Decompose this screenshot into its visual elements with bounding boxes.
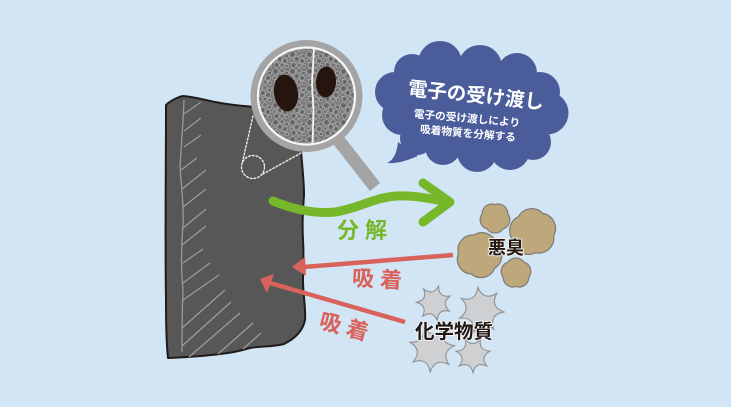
label: adsorption lower: 吸着 xyxy=(317,308,377,347)
red adsorption arrow lower xyxy=(260,274,405,322)
bubble heading: 電子の受け渡し xyxy=(407,77,545,114)
dotted callout circle xyxy=(242,116,301,178)
lens microscopic pores xyxy=(256,46,356,146)
charcoal slab xyxy=(166,96,305,358)
speech bubble xyxy=(375,41,568,172)
label: adsorption upper: 吸着 xyxy=(351,266,409,293)
large pore left xyxy=(274,74,298,112)
lens ring xyxy=(250,40,362,152)
bubble body text xyxy=(413,107,521,144)
red adsorption arrow upper xyxy=(292,255,453,276)
label: chemical substances: 化学物質 xyxy=(415,320,493,343)
slab hatching xyxy=(180,100,261,357)
green decomposition arrow xyxy=(273,183,450,222)
magnifying glass xyxy=(250,40,375,187)
bubble body text: 吸着物質を分解する xyxy=(419,123,516,144)
odor particles xyxy=(447,200,558,291)
bubble body text: 電子の受け渡しにより xyxy=(413,107,521,130)
magnifier handle xyxy=(336,137,375,187)
label: odor: 悪臭 xyxy=(488,238,524,258)
chemical particles xyxy=(402,282,506,378)
large pore right xyxy=(316,66,336,98)
label: decomposition: 分解 xyxy=(337,218,393,243)
infographic canvas xyxy=(164,40,568,374)
